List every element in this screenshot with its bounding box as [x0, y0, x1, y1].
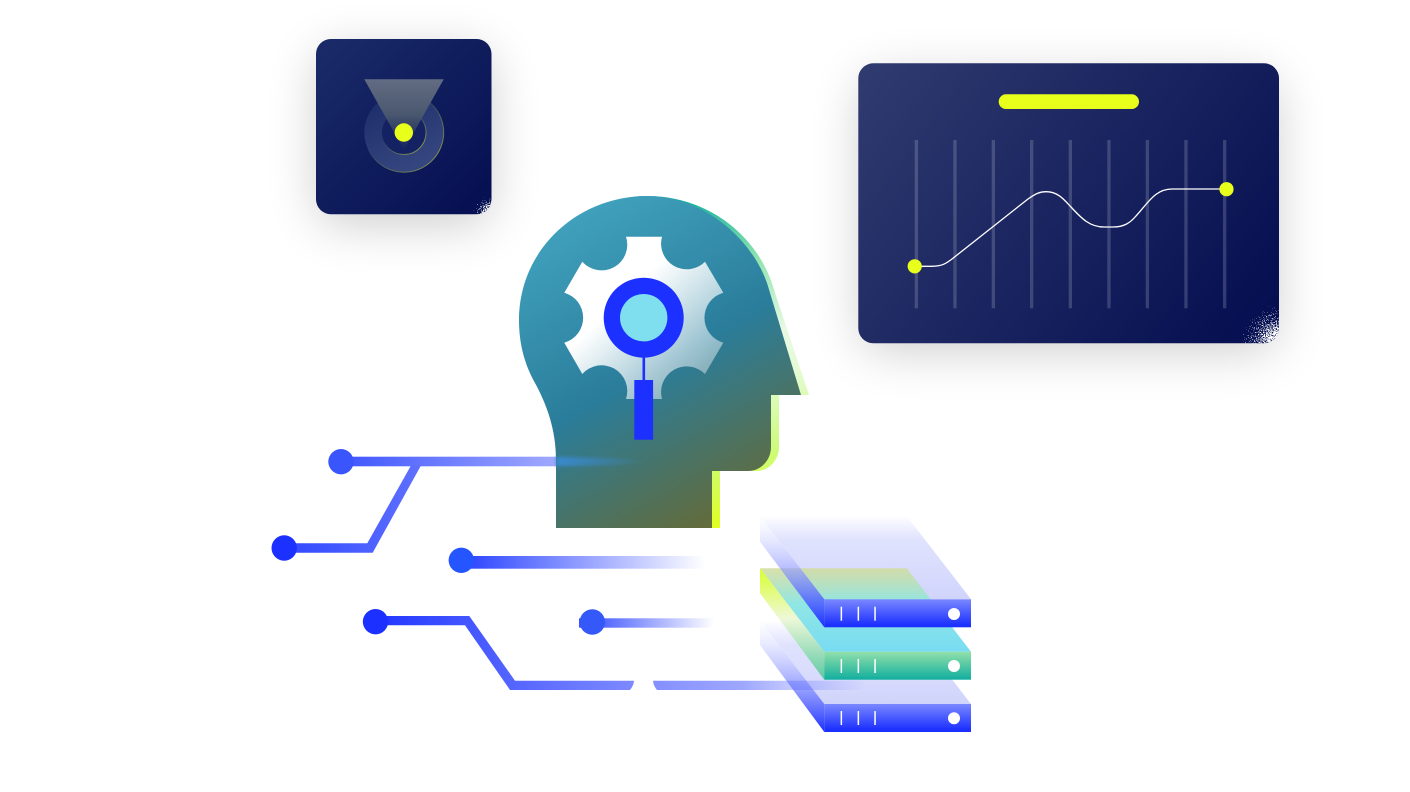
illustration	[272, 29, 1299, 732]
chart start point	[908, 259, 922, 273]
server: middle	[760, 568, 971, 680]
connector node: lower	[363, 609, 388, 634]
connector line: top	[341, 457, 557, 466]
connector line: middle	[461, 556, 705, 569]
icon: yellow lens dot	[395, 123, 413, 142]
head: offset back layer	[527, 196, 809, 528]
connector gap	[629, 680, 658, 691]
panel: line chart card	[858, 63, 1280, 350]
title bar placeholder	[999, 94, 1139, 109]
icon: card corner speckle	[1240, 304, 1280, 344]
connector line: short	[579, 618, 714, 628]
icon: light cone	[364, 79, 444, 150]
chart grid bars	[915, 140, 1226, 308]
server: top, upper surface	[760, 516, 971, 599]
panel: lens card	[316, 39, 492, 224]
connector node: middle	[449, 548, 474, 573]
icon: magnifying glass	[604, 278, 684, 440]
icon: gear	[564, 237, 723, 399]
connector node: left	[272, 535, 297, 561]
connector line: lower route	[376, 616, 866, 690]
chart line	[915, 189, 1226, 266]
server: bottom	[760, 621, 971, 732]
connector line: branch to top	[284, 466, 421, 553]
head: silhouette	[519, 196, 801, 528]
connector glow over head	[556, 457, 648, 466]
icon: lens ring	[364, 93, 444, 172]
connector node: short	[580, 609, 605, 635]
server: top, side and front	[760, 516, 971, 627]
icon: card corner speckle	[474, 198, 492, 214]
chart end point	[1219, 182, 1234, 196]
connector node: top	[328, 449, 354, 474]
server stack	[760, 516, 971, 732]
